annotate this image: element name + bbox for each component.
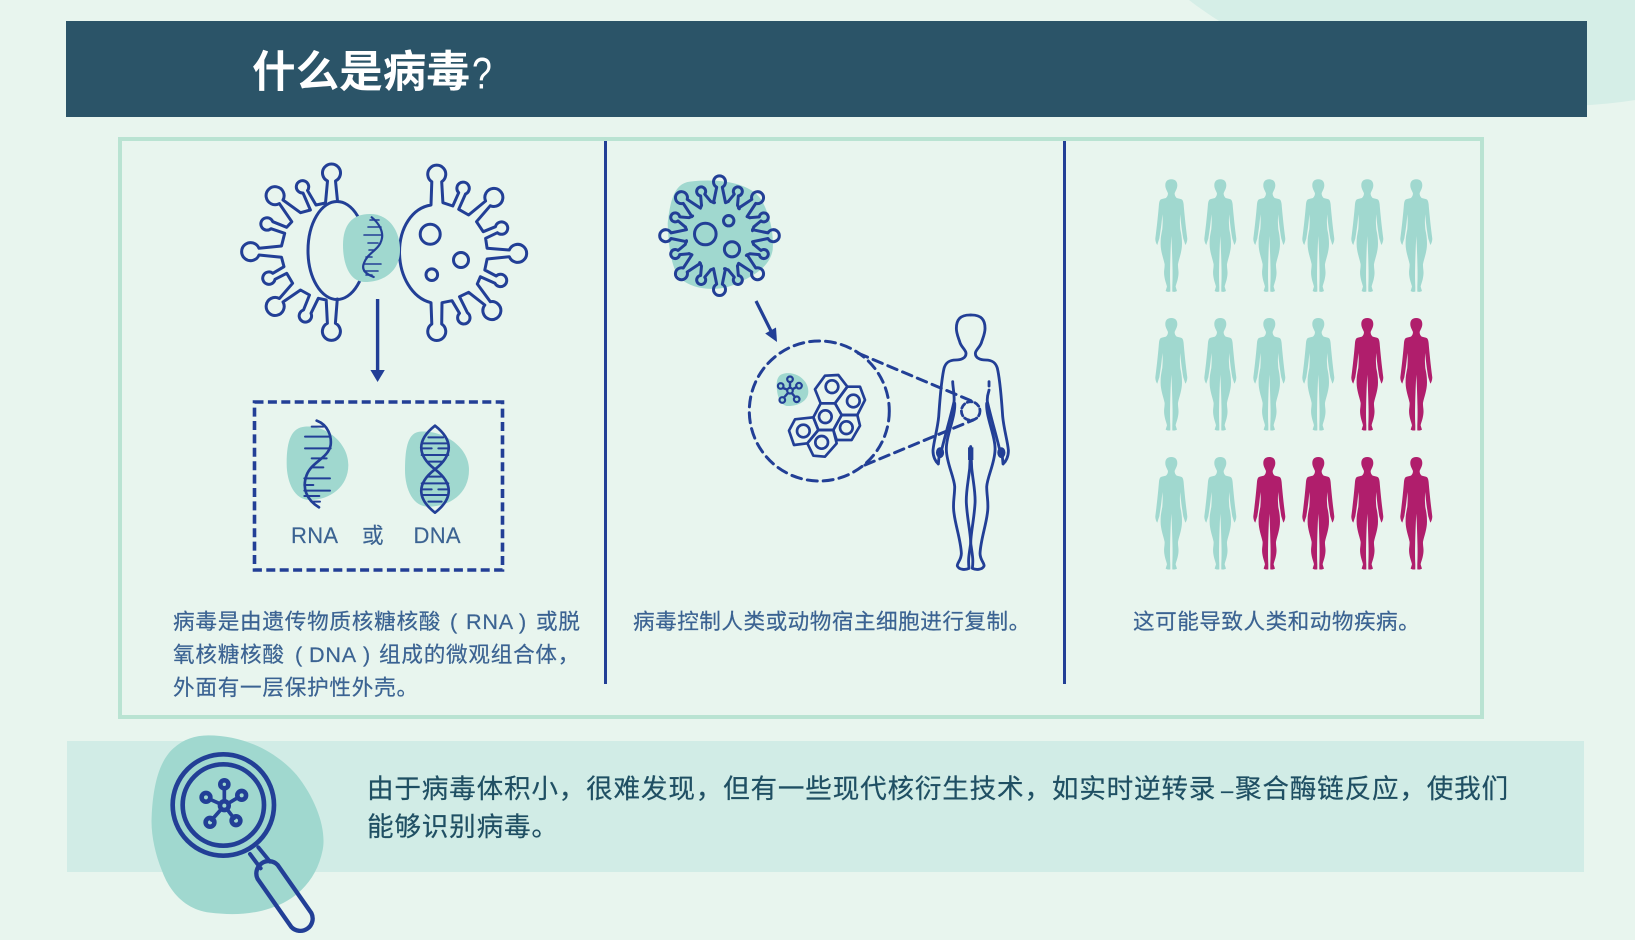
text: virus description: 组成的微观组合体， [379, 642, 580, 667]
icon: host cells [789, 375, 865, 457]
text: virus description: ( [295, 642, 303, 667]
text: detection: – [1221, 778, 1234, 803]
text: virus description: 氧核糖核酸 [173, 642, 285, 667]
title: 什么是病毒 [252, 49, 470, 97]
icon: magnifying glass [152, 735, 324, 931]
label: RNA or DNA: 或 [362, 523, 384, 548]
panel: disease [1133, 179, 1432, 634]
arrow: virus to cell [756, 301, 777, 342]
text: detection: 由于病毒体积小，很难发现，但有一些现代核衍生技术，如实时逆转录 [367, 774, 1216, 804]
text: detection: 能够识别病毒。 [367, 812, 559, 842]
label: RNA or DNA: DNA [414, 523, 461, 548]
main frame [120, 139, 1482, 717]
corner background shape [1189, 0, 1635, 108]
text: virus description: ) [363, 642, 371, 667]
icon: RNA strand [287, 421, 348, 507]
title question mark: ? [472, 49, 492, 98]
dashed box [254, 402, 502, 570]
magnified cell circle [749, 341, 980, 481]
panel: detection band [67, 735, 1584, 931]
header bar [66, 21, 1587, 117]
label: RNA or DNA: RNA [291, 523, 338, 548]
column divider 1 [604, 141, 607, 684]
text: virus description: ( [450, 609, 458, 634]
icon: virus with blob [660, 176, 779, 296]
text: disease: 这可能导致人类和动物疾病。 [1133, 609, 1420, 634]
arrow: down [370, 299, 385, 382]
panel: virus genome [173, 164, 581, 700]
pictogram: people row 2 [1155, 318, 1432, 431]
text: virus description: 外面有一层保护性外壳。 [173, 675, 419, 700]
text: replication: 病毒控制人类或动物宿主细胞进行复制。 [633, 609, 1031, 634]
text: virus description: DNA [309, 642, 357, 667]
text: virus description: RNA [466, 609, 514, 634]
pictogram: people row 3 [1155, 457, 1432, 570]
icon: DNA strand [405, 426, 469, 513]
icon: opened virus [242, 164, 527, 341]
panel: virus replication [633, 176, 1031, 634]
text: detection: 聚合酶链反应，使我们 [1235, 774, 1509, 804]
icon: small virus [777, 373, 808, 406]
pictogram: people row 1 [1155, 179, 1432, 292]
icon: human body outline [933, 315, 1008, 569]
text: virus description: 病毒是由遗传物质核糖核酸 [173, 609, 441, 634]
text: virus description: 或脱 [536, 609, 581, 634]
text: virus description: ) [519, 609, 527, 634]
column divider 2 [1063, 141, 1066, 684]
